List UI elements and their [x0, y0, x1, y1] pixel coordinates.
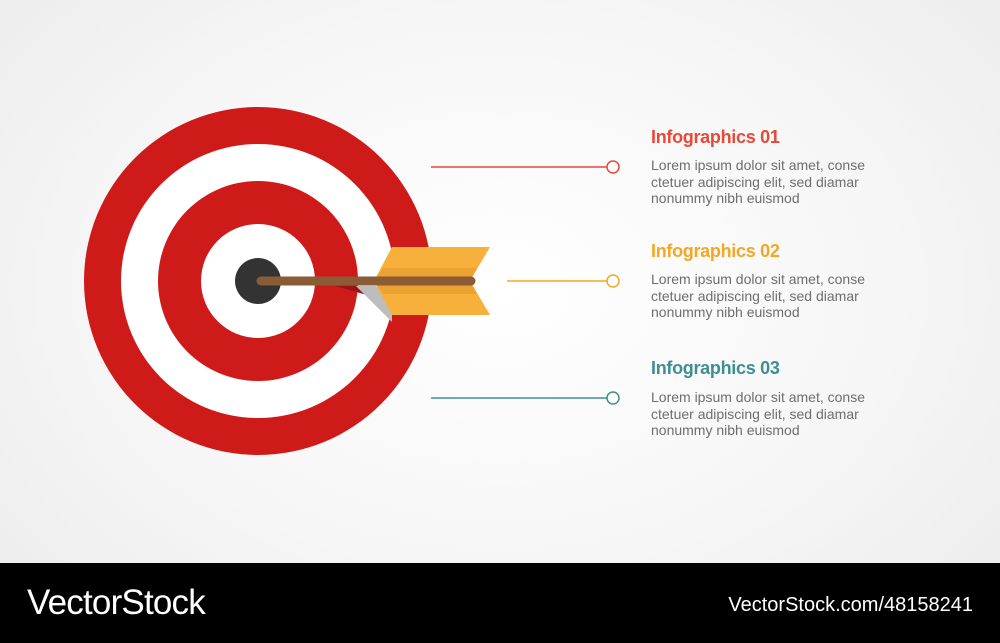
connector 03 — [431, 392, 619, 404]
text 02: Lorem ipsum dolor sit amet, conse — [651, 271, 865, 287]
text 03: ctetuer adipiscing elit, sed diamar — [651, 406, 859, 422]
text 01 — [651, 157, 865, 206]
text 02 — [651, 271, 865, 320]
heading 03: Infographics 03 — [651, 358, 780, 378]
footer logo: VectorStock — [27, 583, 205, 622]
text 01: ctetuer adipiscing elit, sed diamar — [651, 174, 859, 190]
text 02: nonummy nibh euismod — [651, 304, 800, 320]
text 03: nonummy nibh euismod — [651, 422, 800, 438]
text 01: Lorem ipsum dolor sit amet, conse — [651, 157, 865, 173]
connector 02 — [507, 275, 619, 287]
arrow — [261, 247, 490, 322]
text 03 — [651, 389, 865, 438]
heading 02: Infographics 02 — [651, 241, 780, 261]
text 01: nonummy nibh euismod — [651, 190, 800, 206]
footer url: VectorStock.com/48158241 — [728, 594, 973, 616]
text 03: Lorem ipsum dolor sit amet, conse — [651, 389, 865, 405]
target — [84, 107, 432, 455]
connector 01 — [431, 161, 619, 173]
footer bar — [0, 563, 1000, 643]
heading 01: Infographics 01 — [651, 127, 780, 147]
text 02: ctetuer adipiscing elit, sed diamar — [651, 288, 859, 304]
